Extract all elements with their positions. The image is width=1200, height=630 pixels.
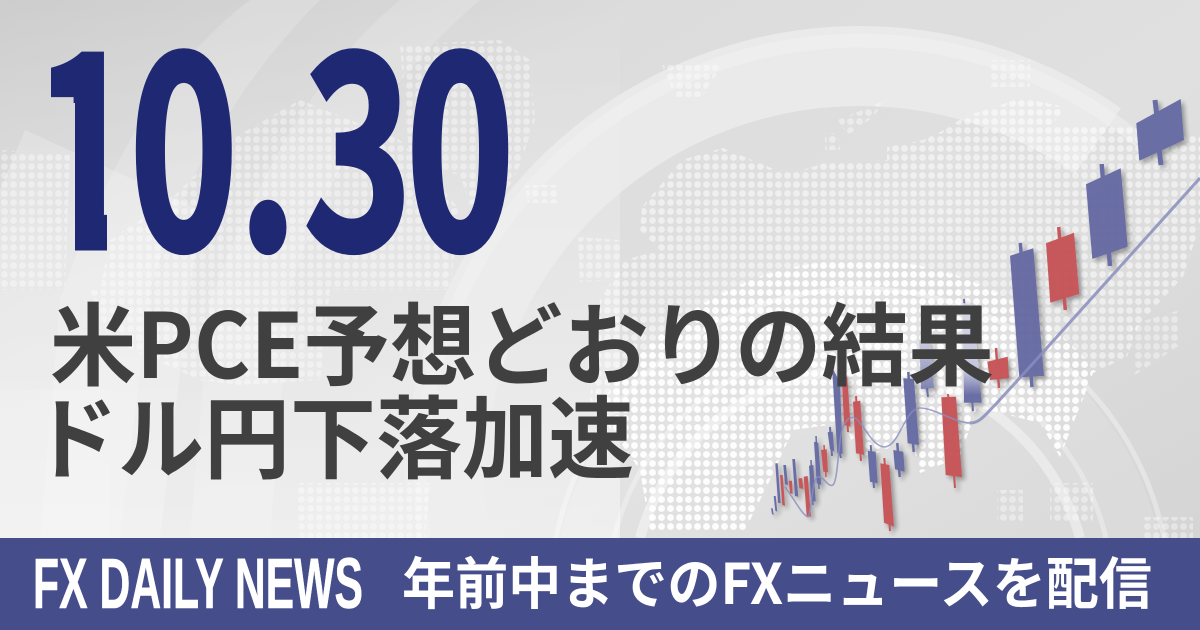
- headline: [32, 274, 994, 497]
- faded candles behind headline: [919, 299, 982, 411]
- moving average line: [785, 178, 1200, 517]
- headline line 1: 米PCE予想どおりの結果: [50, 274, 994, 404]
- bottom banner: [0, 538, 1200, 630]
- red candles: [780, 227, 1079, 531]
- banner tagline: 年前中までのFXニュースを配信: [402, 540, 1152, 621]
- candlestick chart: [771, 99, 1184, 531]
- banner label: FX DAILY NEWS: [33, 545, 363, 624]
- headline line 2: ドル円下落加速: [32, 367, 634, 497]
- blue candles: [771, 99, 1184, 515]
- date: [51, 48, 508, 256]
